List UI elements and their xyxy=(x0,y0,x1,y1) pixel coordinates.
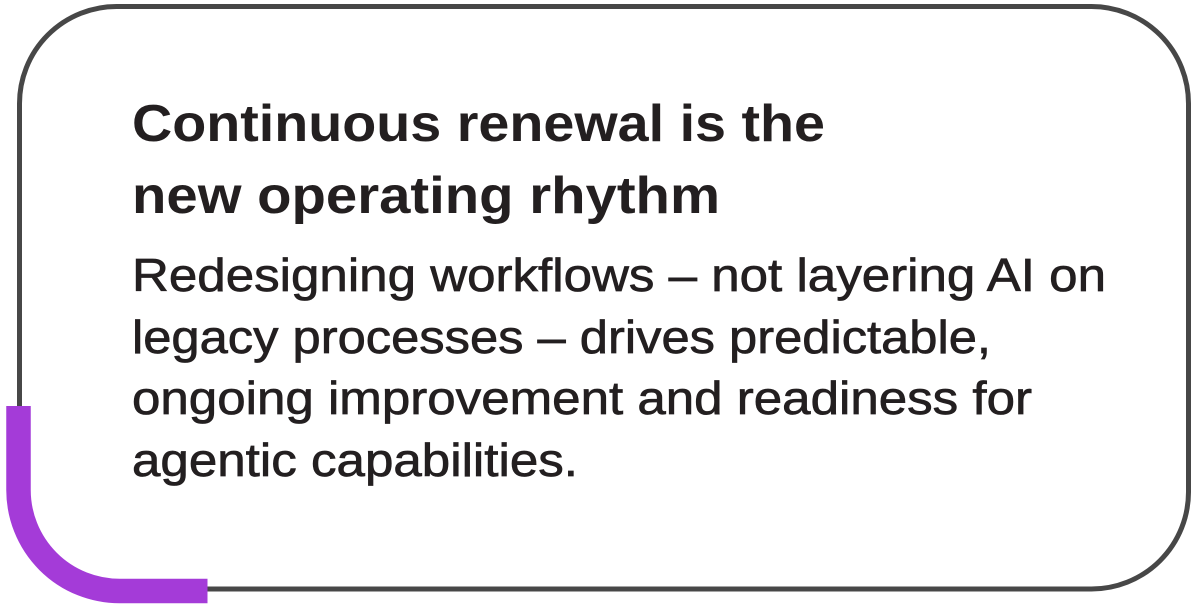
heading: Continuous renewal is the xyxy=(132,95,825,153)
accent: purple corner bracket xyxy=(18,406,208,591)
body text: Redesigning workflows – not layering AI on xyxy=(132,249,1106,301)
heading xyxy=(132,95,825,225)
body text: agentic capabilities. xyxy=(132,434,578,486)
body text: ongoing improvement and readiness for xyxy=(132,372,1032,424)
body text: legacy processes – drives predictable, xyxy=(132,311,991,363)
body text xyxy=(132,249,1106,486)
heading: new operating rhythm xyxy=(132,167,720,225)
